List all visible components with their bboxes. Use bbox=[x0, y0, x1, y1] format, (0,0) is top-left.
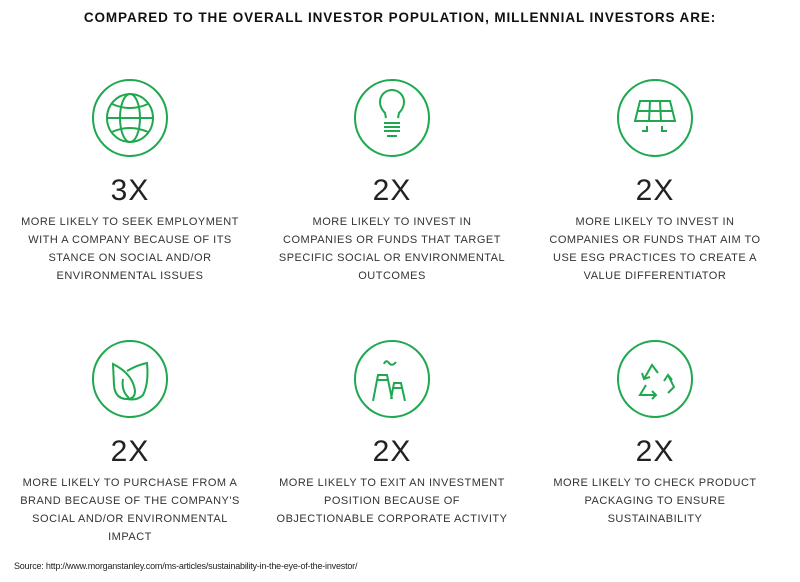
text: POSITION BECAUSE OF bbox=[324, 495, 460, 507]
text: MORE LIKELY TO INVEST IN bbox=[576, 216, 734, 228]
text: IMPACT bbox=[108, 531, 152, 543]
title: COMPARED TO THE OVERALL INVESTOR POPULATION, MILLENNIAL INVESTORS ARE: bbox=[84, 10, 716, 25]
text: SPECIFIC SOCIAL OR ENVIRONMENTAL bbox=[279, 252, 505, 264]
panel: ESG practices bbox=[549, 79, 761, 282]
text: ENVIRONMENTAL ISSUES bbox=[57, 270, 203, 282]
text: COMPANIES OR FUNDS THAT AIM TO bbox=[549, 234, 761, 246]
icon: light bulb bbox=[354, 79, 430, 157]
text: USE ESG PRACTICES TO CREATE A bbox=[553, 252, 757, 264]
text bbox=[21, 216, 239, 282]
panel: invest outcomes bbox=[279, 79, 505, 282]
panel: packaging bbox=[553, 340, 757, 525]
text: MORE LIKELY TO CHECK PRODUCT bbox=[553, 477, 757, 489]
text bbox=[279, 216, 505, 282]
panel: purchase bbox=[20, 340, 240, 543]
text: MORE LIKELY TO INVEST IN bbox=[313, 216, 471, 228]
source note: Source: http://www.morganstanley.com/ms-articles/sustainability-in-the-eye-of-the-investor/ bbox=[14, 561, 357, 571]
icon: solar panel bbox=[617, 79, 693, 157]
number: 2X bbox=[111, 435, 149, 468]
icon: globe bbox=[92, 79, 168, 157]
panel: exit investment bbox=[277, 340, 507, 525]
text: MORE LIKELY TO EXIT AN INVESTMENT bbox=[279, 477, 505, 489]
panel: employment bbox=[21, 79, 239, 282]
text: OUTCOMES bbox=[358, 270, 426, 282]
text: BRAND BECAUSE OF THE COMPANY'S bbox=[20, 495, 240, 507]
text: SUSTAINABILITY bbox=[608, 513, 702, 525]
text: COMPANIES OR FUNDS THAT TARGET bbox=[283, 234, 501, 246]
number: 2X bbox=[636, 174, 674, 207]
text bbox=[277, 477, 507, 525]
icon: leaves bbox=[92, 340, 168, 418]
text bbox=[549, 216, 761, 282]
text: VALUE DIFFERENTIATOR bbox=[584, 270, 726, 282]
text bbox=[20, 477, 240, 543]
number: 3X bbox=[111, 174, 149, 207]
number: 2X bbox=[373, 435, 411, 468]
icon: factory cooling towers bbox=[354, 340, 430, 418]
number: 2X bbox=[636, 435, 674, 468]
text: SOCIAL AND/OR ENVIRONMENTAL bbox=[32, 513, 228, 525]
icon: recycle bbox=[617, 340, 693, 418]
text: MORE LIKELY TO SEEK EMPLOYMENT bbox=[21, 216, 239, 228]
number: 2X bbox=[373, 174, 411, 207]
text: STANCE ON SOCIAL AND/OR bbox=[48, 252, 212, 264]
text: MORE LIKELY TO PURCHASE FROM A bbox=[23, 477, 237, 489]
text: WITH A COMPANY BECAUSE OF ITS bbox=[28, 234, 232, 246]
text bbox=[553, 477, 757, 525]
text: PACKAGING TO ENSURE bbox=[585, 495, 725, 507]
text: OBJECTIONABLE CORPORATE ACTIVITY bbox=[277, 513, 507, 525]
